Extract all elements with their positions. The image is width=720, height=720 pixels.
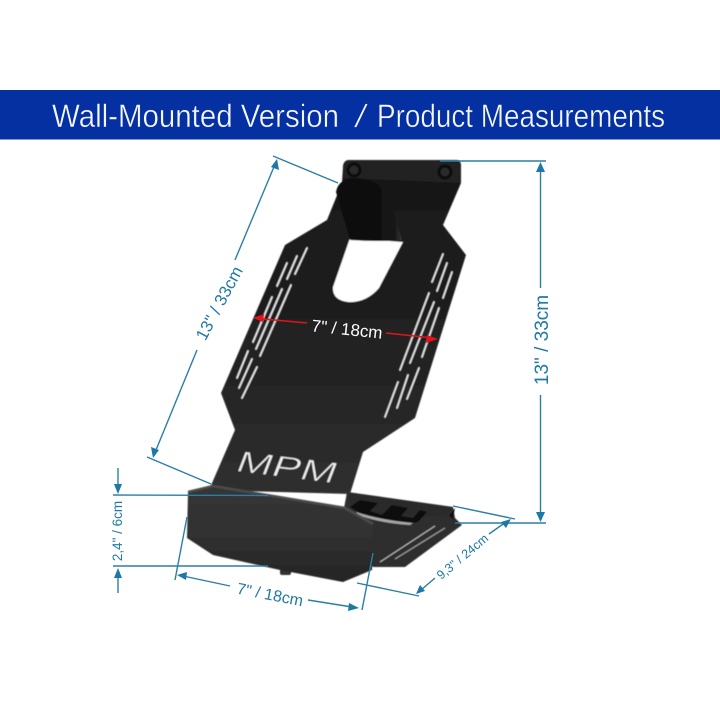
dimension: vertical height 13 in: 13" / 33cm bbox=[532, 295, 553, 385]
title banner bbox=[0, 90, 720, 140]
product: wall mount stand bbox=[187, 160, 466, 582]
dimension: base width 7 in: 7" / 18cm bbox=[235, 581, 304, 610]
hook hump bbox=[336, 178, 402, 241]
dimension: diagonal height 13 in bbox=[147, 156, 338, 484]
dimension: base depth 9.3 in: 9,3" / 24cm bbox=[434, 531, 491, 582]
title: Wall-Mounted Version bbox=[52, 98, 339, 134]
ventilation slits bbox=[237, 248, 452, 417]
dimension: base depth 9.3 in bbox=[357, 506, 515, 596]
bolt left bbox=[346, 162, 362, 178]
dimension: base width 7 in bbox=[175, 517, 373, 611]
vertical plate bbox=[209, 160, 466, 494]
wall bracket top bbox=[343, 160, 461, 183]
dimension: base height 2.4 in: 2,4" / 6cm bbox=[110, 501, 125, 561]
title bbox=[52, 98, 665, 134]
dimension: vertical height 13 in bbox=[440, 161, 553, 523]
title: Product Measurements bbox=[377, 98, 665, 134]
oval cutout bbox=[333, 238, 403, 302]
dimension: base height 2.4 in bbox=[110, 468, 268, 593]
foot screw bbox=[280, 566, 291, 575]
dimension: diagonal height 13 in: 13" / 33cm bbox=[192, 263, 247, 343]
rear tray of base bbox=[340, 492, 462, 567]
base front bbox=[187, 485, 373, 582]
dimension: width 7 in, red, on plate bbox=[253, 314, 438, 343]
title: / bbox=[353, 98, 369, 134]
MPM logo: MPM bbox=[231, 445, 343, 490]
bolt right bbox=[438, 164, 452, 180]
dimension: width 7 in, red, on plate: 7" / 18cm bbox=[311, 316, 383, 343]
